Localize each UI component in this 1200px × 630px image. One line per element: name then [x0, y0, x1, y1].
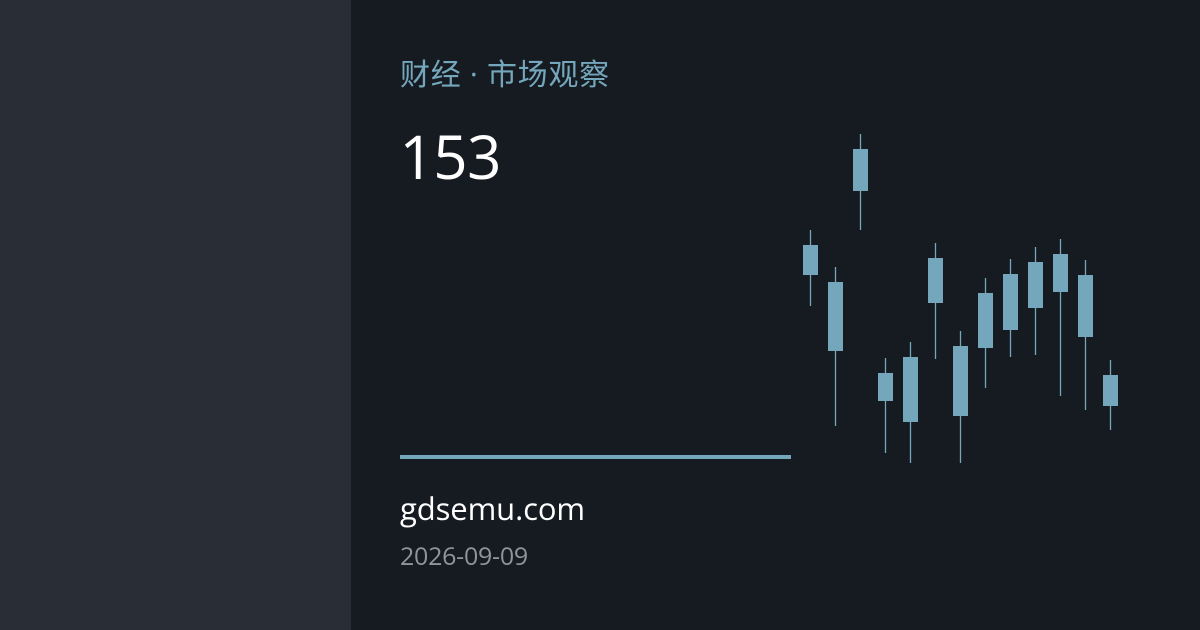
text: domain: gdsemu.com [400, 488, 585, 530]
panel: left sidebar [0, 0, 351, 630]
accent rule [400, 455, 791, 459]
heading: category label: 财经 · 市场观察 [400, 53, 610, 94]
text: date: 2026-09-09 [400, 539, 528, 573]
title: number: 153 [400, 115, 501, 197]
